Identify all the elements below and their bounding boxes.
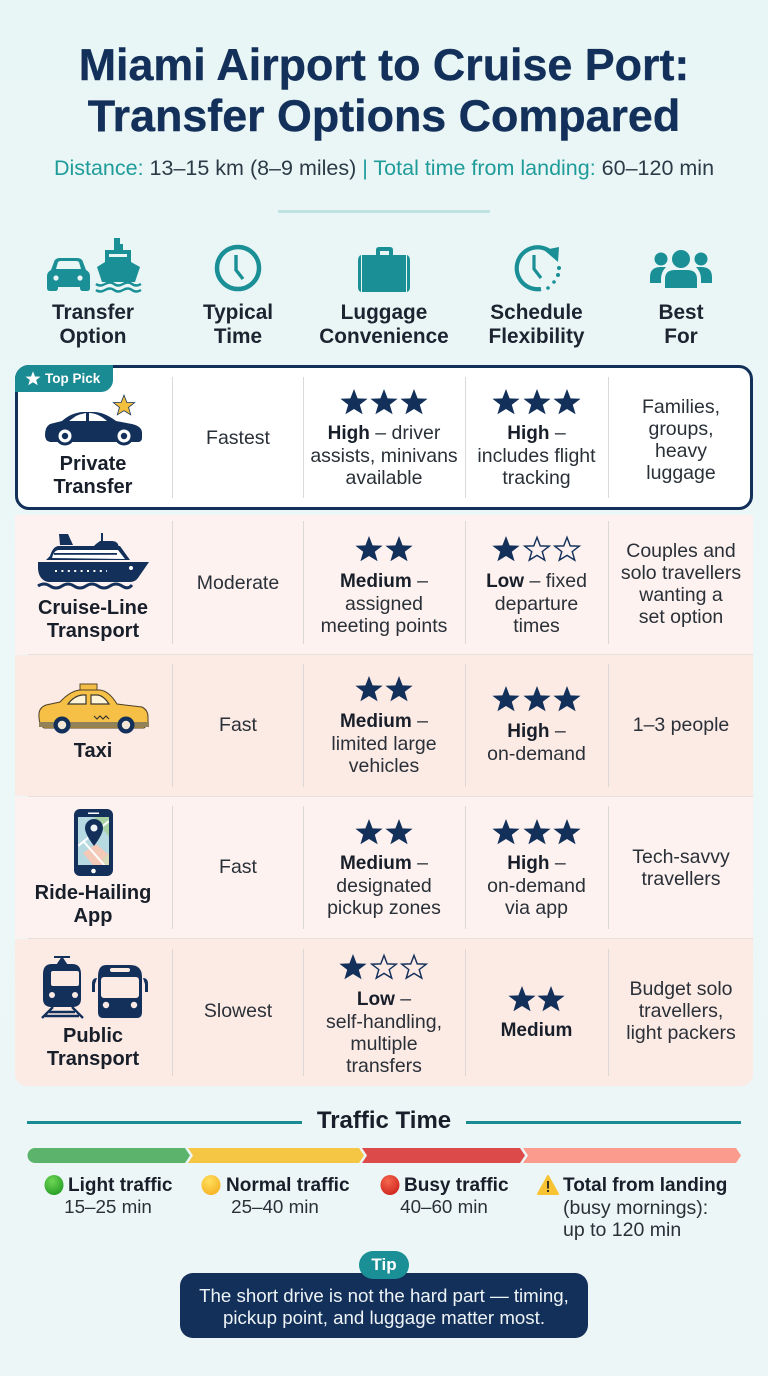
text: private luggage: assists, minivans [310, 445, 458, 467]
icon: train and bus [42, 957, 148, 1018]
row: private transfer [54, 453, 132, 498]
text: ride schedule: via app [505, 897, 568, 919]
icon: cruise ship [38, 533, 149, 588]
text: public luggage: Low – [357, 988, 411, 1010]
heading: schedule [489, 301, 584, 348]
text: moderate: Moderate [197, 572, 279, 594]
stars: public transport luggage [339, 954, 426, 979]
text: slowest: Slowest [204, 1000, 272, 1022]
icon: schedule flexibility [517, 247, 561, 290]
text: cruise luggage: assigned [345, 593, 423, 615]
legend value: normal: 25–40 min [231, 1196, 319, 1217]
text: public luggage: transfers [346, 1055, 422, 1077]
text: ride best for: travellers [641, 868, 721, 890]
icon: green dot [44, 1175, 64, 1195]
text: public best for: Budget solo [630, 978, 732, 1000]
legend value: busy: 40–60 min [400, 1196, 488, 1217]
stars: public transport schedule [508, 986, 565, 1011]
row: taxi: Taxi [74, 740, 112, 762]
row backgrounds [15, 515, 753, 654]
text: public best for [626, 978, 736, 1044]
heading: best for: For [664, 325, 698, 348]
text: private best for [642, 396, 720, 484]
icons and ratings layer [26, 371, 741, 1195]
text: public best for: travellers, [639, 1000, 723, 1022]
text: cruise luggage: Medium – [340, 570, 428, 592]
text: private luggage: available [346, 467, 422, 489]
text: private luggage [310, 422, 458, 489]
text: ride luggage [327, 852, 441, 919]
icon: private car [45, 395, 142, 446]
heading: typical time: Time [214, 325, 262, 348]
legend value: light: 15–25 min [64, 1196, 152, 1217]
text: taxi time: Fast [219, 714, 257, 736]
text: private schedule: High – [507, 422, 566, 444]
row: ride-hailing app: App [74, 905, 112, 927]
row: ride-hailing app: Ride-Hailing [35, 882, 151, 904]
row: public transport: Transport [47, 1048, 139, 1070]
icon: taxi [39, 684, 149, 734]
text: taxi luggage: Medium – [340, 710, 428, 732]
text: taxi schedule: on-demand [487, 743, 586, 765]
text: cruise best for: solo travellers [621, 562, 741, 584]
legend: total from landing [563, 1175, 727, 1241]
legend: busy traffic: Busy traffic [404, 1175, 509, 1196]
heading: luggage: Luggage [341, 301, 427, 324]
stars: taxi luggage [355, 676, 413, 701]
icon: suitcase [358, 247, 410, 292]
panel: top pick row [15, 365, 753, 510]
text: ride best for: Tech-savvy [632, 846, 730, 868]
text: private best for: heavy [655, 440, 707, 462]
text: public luggage: multiple [350, 1033, 418, 1055]
heading: best for [658, 301, 704, 348]
column icons [47, 238, 712, 293]
text: cruise luggage: meeting points [321, 615, 447, 637]
text: private best for: luggage [646, 462, 716, 484]
text: cruise best for: wanting a [639, 584, 723, 606]
badge: tip: Tip [371, 1255, 397, 1274]
stars: private transfer luggage [340, 389, 428, 414]
stars: cruise schedule [492, 536, 579, 561]
text: cruise luggage [321, 570, 447, 637]
callout: tip: The short drive is not the hard part — timing, [199, 1285, 569, 1306]
stars: ride-hailing luggage [355, 819, 413, 844]
icon: group [650, 250, 712, 288]
text: private best for: Families, [642, 396, 720, 418]
callout: tip: pickup point, and luggage matter most. [223, 1306, 545, 1328]
text: public best for: light packers [626, 1022, 736, 1044]
stars: private transfer schedule [492, 389, 581, 414]
text: private schedule: tracking [502, 467, 571, 489]
heading: traffic time: Traffic Time [317, 1107, 451, 1134]
row: public transport [47, 1025, 139, 1070]
heading: best for: Best [658, 301, 704, 324]
text: cruise schedule: departure [495, 593, 578, 615]
heading: luggage: Convenience [319, 325, 449, 348]
text: cruise schedule [486, 570, 587, 637]
legend: total from landing: up to 120 min [563, 1219, 681, 1241]
text: cruise best for [621, 540, 741, 628]
text: taxi luggage: limited large [331, 733, 437, 755]
column headings [52, 301, 134, 348]
stars: cruise luggage [355, 536, 413, 561]
text: public luggage: self-handling, [326, 1011, 442, 1033]
row: private transfer: Private [60, 453, 126, 475]
text: ride time: Fast [219, 856, 257, 878]
icon: car and ship [47, 238, 141, 292]
text: private best for: groups, [648, 418, 714, 440]
text: ride schedule: on-demand [487, 875, 586, 897]
heading: typical time: Typical [203, 301, 273, 324]
icon: red dot [380, 1175, 400, 1195]
text: taxi best for: 1–3 people [633, 714, 729, 736]
icon: yellow dot [202, 1175, 220, 1195]
callout: tip [180, 1273, 588, 1338]
stars: taxi schedule [492, 686, 581, 711]
text: private luggage: High – driver [328, 422, 440, 444]
text: ride luggage: designated [336, 875, 432, 897]
row: public transport: Public [63, 1025, 123, 1047]
text: ride schedule: High – [507, 852, 566, 874]
badge: top pick: Top Pick [45, 371, 100, 386]
text: cruise schedule: times [513, 615, 560, 637]
subtitle: Distance: 13–15 km (8–9 miles) | Total time from landing: 60–120 min [54, 156, 714, 180]
text: fastest: Fastest [206, 427, 270, 449]
row: cruise-line transport [38, 597, 148, 642]
text: public schedule: Medium [501, 1020, 572, 1041]
traffic time bar [28, 1148, 741, 1163]
heading: typical time [203, 301, 273, 348]
text: private schedule [477, 422, 596, 489]
row: ride-hailing app [35, 882, 151, 927]
text: taxi luggage [331, 710, 437, 777]
text: ride best for [632, 846, 730, 890]
text: ride luggage: Medium – [340, 852, 428, 874]
icon: top pick star [26, 371, 40, 385]
text: cruise best for: set option [639, 606, 723, 628]
text: public luggage [326, 988, 442, 1077]
heading: schedule: Flexibility [489, 325, 584, 348]
badge: tip [359, 1251, 409, 1279]
icon: clock [217, 247, 259, 289]
row: cruise-line transport: Cruise-Line [38, 597, 148, 619]
legend: light traffic: Light traffic [68, 1175, 172, 1196]
title: Transfer Options Compared [88, 91, 680, 141]
legend: total from landing: Total from landing [563, 1175, 727, 1196]
title: Miami Airport to Cruise Port: [79, 40, 689, 90]
row: private transfer: Transfer [54, 476, 132, 498]
heading: schedule: Schedule [490, 301, 583, 324]
icon: warning triangle [538, 1176, 558, 1194]
heading: luggage [319, 301, 449, 348]
icon: phone with map [74, 809, 113, 876]
row: cruise-line transport: Transport [47, 620, 139, 642]
text: private schedule: includes flight [477, 445, 596, 467]
stars: ride-hailing schedule [492, 819, 581, 844]
legend: normal traffic: Normal traffic [226, 1175, 350, 1196]
text: taxi schedule [487, 720, 586, 765]
column headings: Transfer [52, 301, 134, 324]
title [79, 40, 689, 141]
text: taxi luggage: vehicles [349, 755, 419, 777]
text: cruise schedule: Low – fixed [486, 570, 587, 592]
legend: total from landing: (busy mornings): [563, 1197, 708, 1219]
badge: top pick [15, 365, 113, 392]
text: ride luggage: pickup zones [327, 897, 441, 919]
text: cruise best for: Couples and [626, 540, 736, 562]
text: taxi schedule: High – [507, 720, 566, 742]
text: ride schedule [487, 852, 586, 919]
column headings: Option [60, 325, 126, 348]
